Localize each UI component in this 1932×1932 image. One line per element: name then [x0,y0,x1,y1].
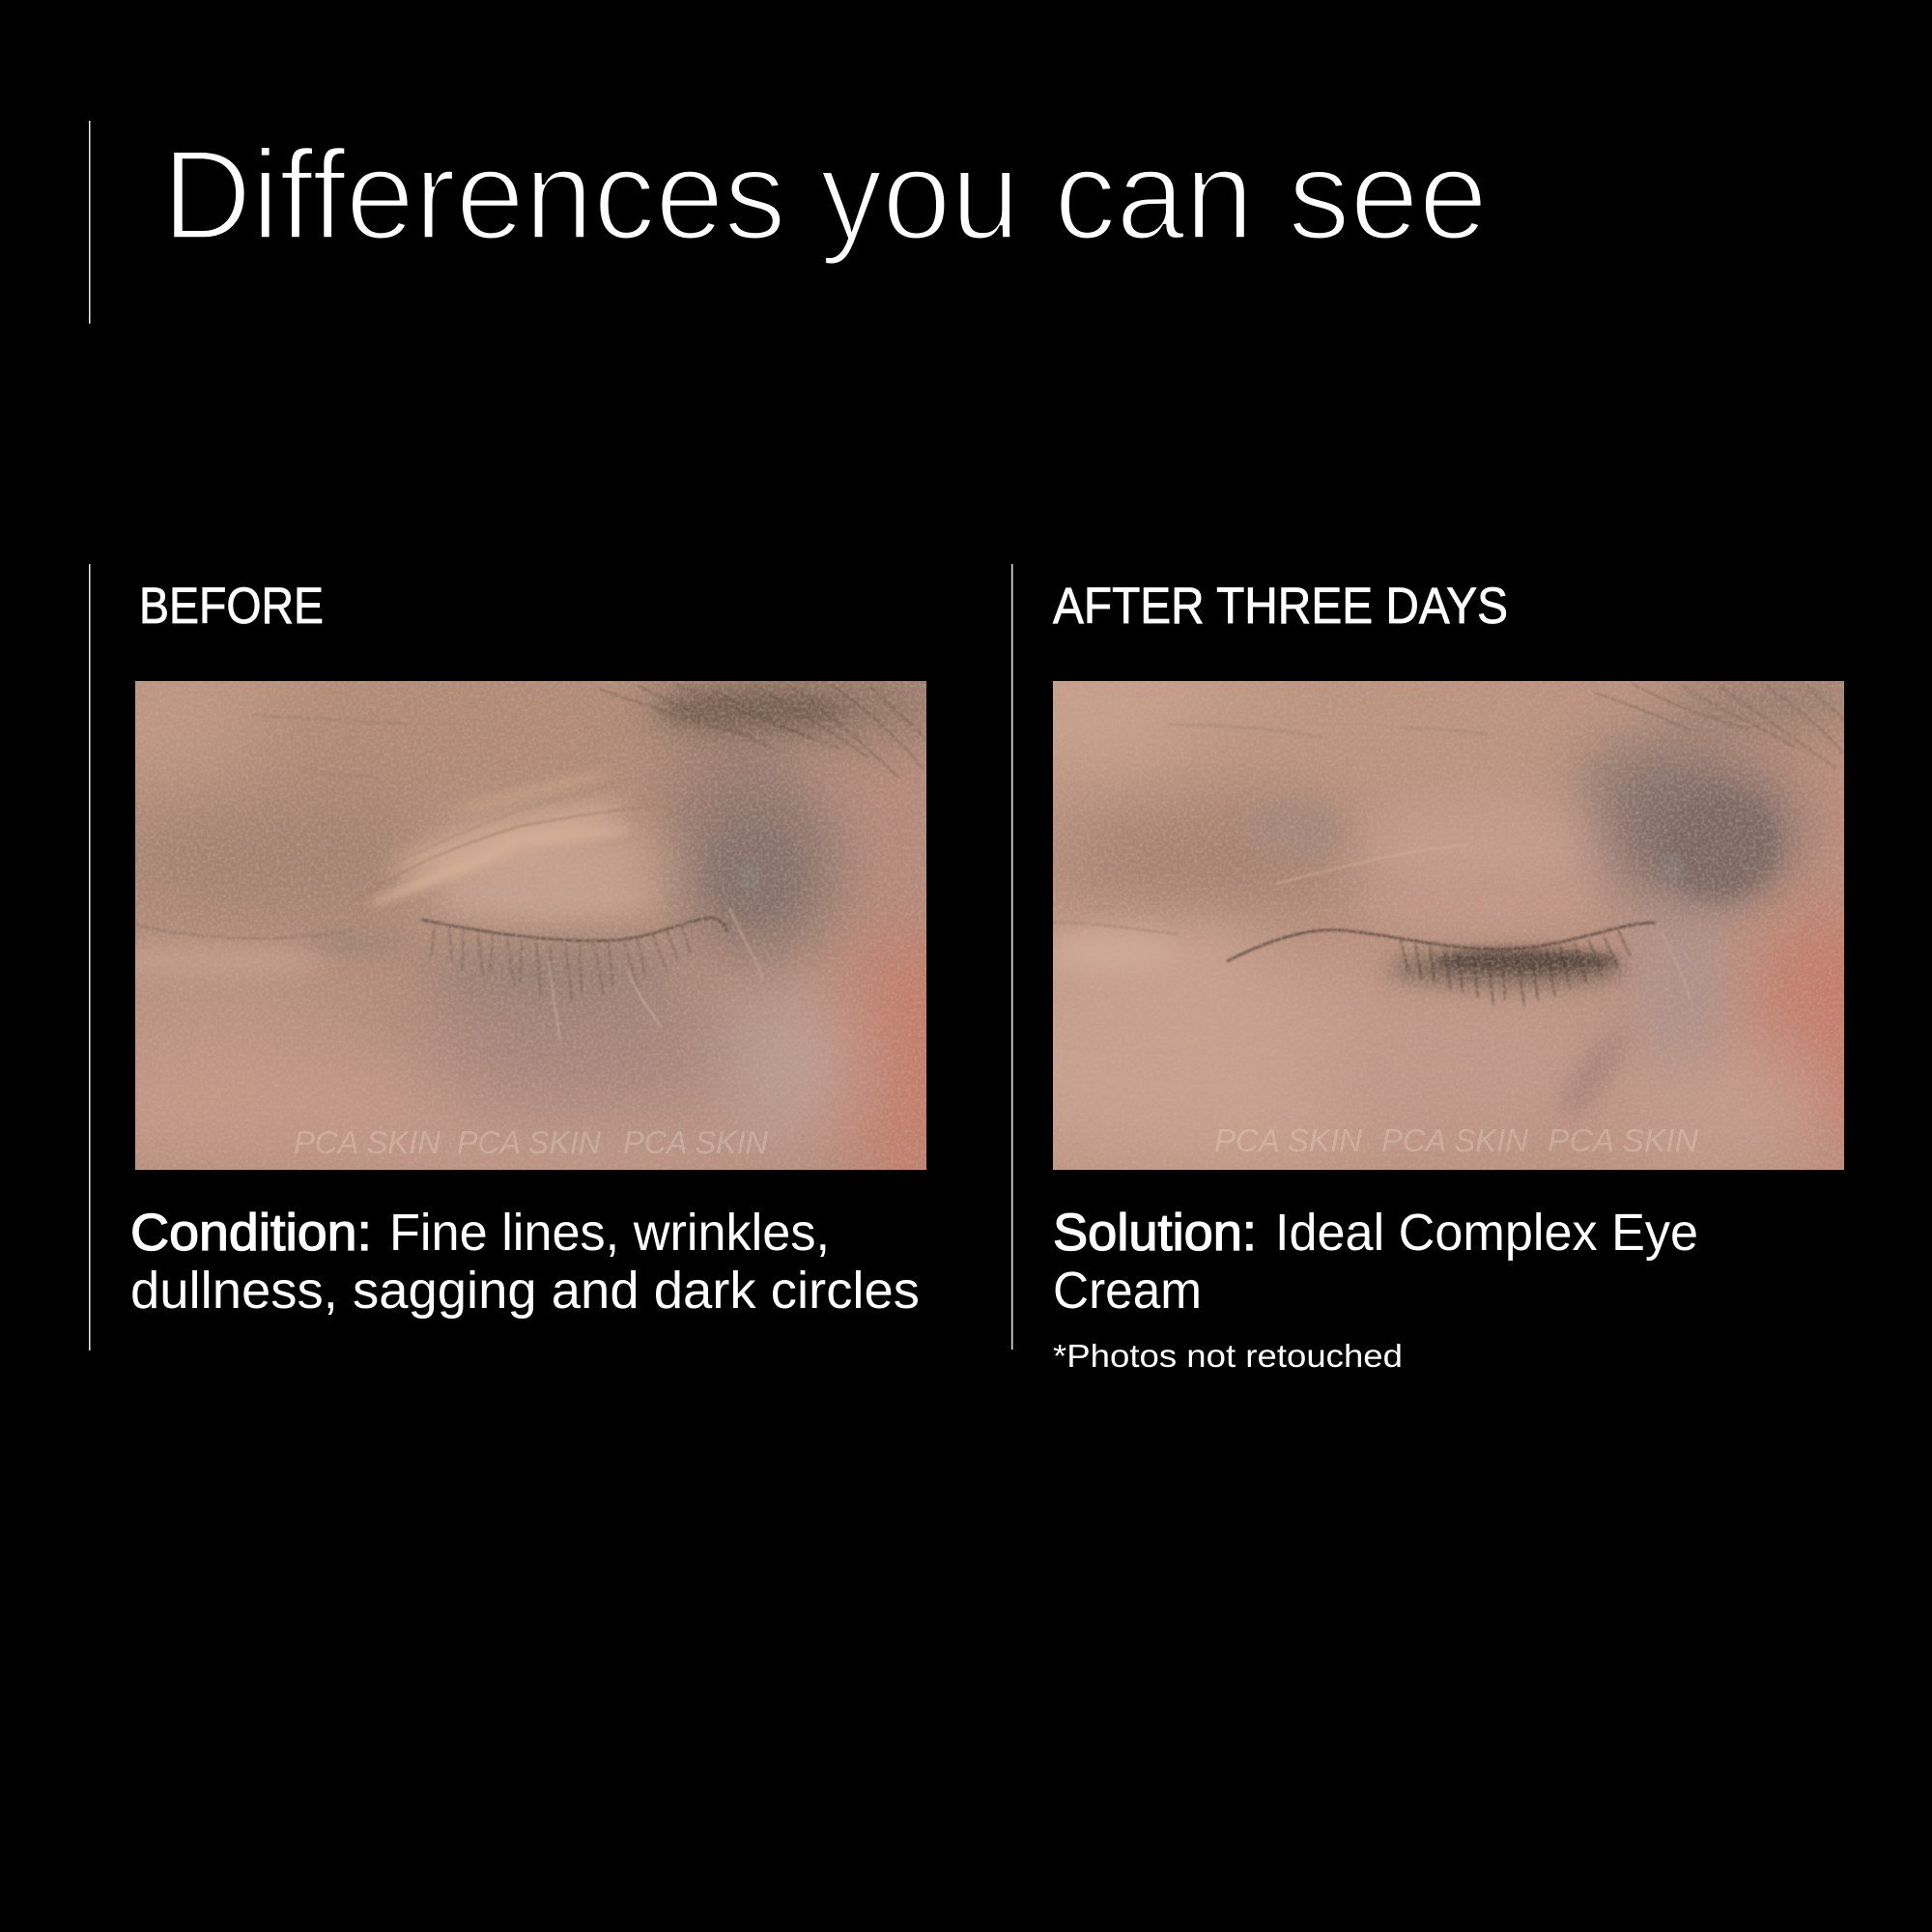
caption: condition [130,1204,920,1320]
heading: before: BEFORE [139,578,324,635]
caption: solution: Cream [1053,1262,1202,1320]
watermark: PCA SKIN [1381,1122,1528,1158]
caption: condition: Condition: [130,1204,372,1262]
footnote: *Photos not retouched [1053,1338,1403,1374]
watermark: PCA SKIN [294,1124,440,1160]
watermark: PCA SKIN [623,1124,768,1160]
caption: solution: Solution: [1053,1204,1257,1262]
caption: condition: Fine lines, wrinkles, [389,1204,830,1262]
watermark: PCA SKIN [1214,1122,1362,1158]
heading: after three days: AFTER THREE DAYS [1053,578,1508,635]
panel: before [0,564,1029,1350]
title block: Differences you can see [162,124,1488,266]
caption: condition: dullness, sagging and dark circles [130,1262,920,1320]
caption: solution [1053,1204,1698,1320]
caption: solution: Ideal Complex Eye [1275,1204,1698,1262]
watermark [1214,1122,1698,1158]
photo: after treatment eye [1053,681,1844,1170]
watermark: PCA SKIN [1548,1122,1698,1158]
watermark [294,1124,768,1160]
panel: after three days [889,564,1932,1374]
photo: before treatment eye [135,681,926,1170]
watermark: PCA SKIN [457,1124,601,1160]
